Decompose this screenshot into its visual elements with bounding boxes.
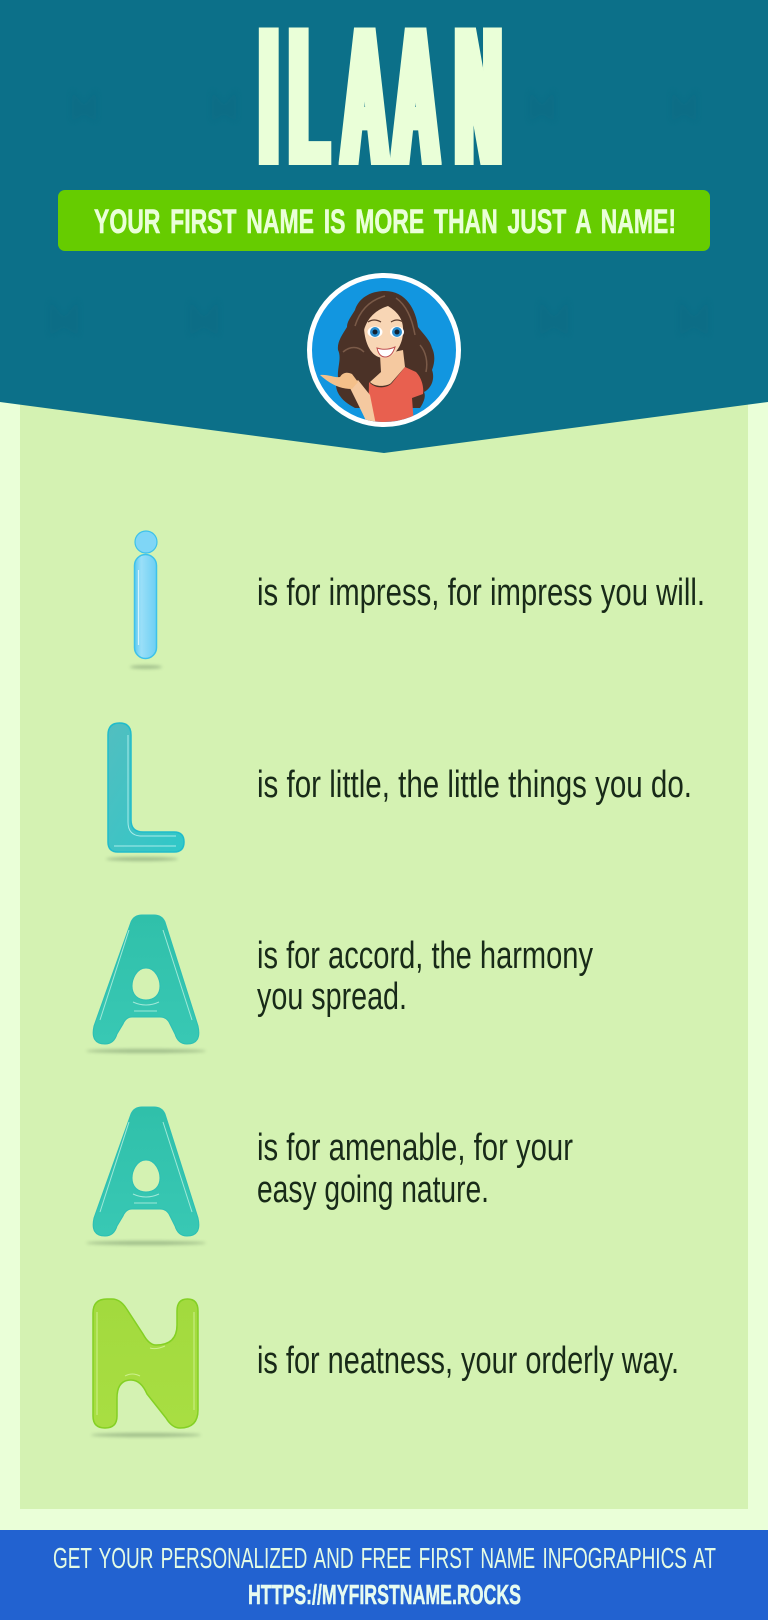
icon: letter A second — [86, 1107, 206, 1245]
panel: letters background — [20, 380, 748, 1509]
icon: woman avatar — [310, 276, 458, 425]
row: letter A: you spread. — [257, 976, 407, 1018]
row: letter N — [91, 1299, 679, 1437]
icon: letter A — [86, 915, 206, 1053]
header band — [0, 0, 768, 453]
icon: letter N — [91, 1299, 201, 1437]
text: amenable: is for amenable, for your — [257, 1127, 573, 1169]
footer text: url: HTTPS://MYFIRSTNAME.ROCKS — [248, 1579, 521, 1610]
icon: letter I — [130, 531, 162, 669]
row: letter A second: easy going nature. — [257, 1169, 489, 1211]
icon: letter L — [106, 723, 184, 861]
footer — [0, 1530, 768, 1620]
row: letter A second — [86, 1107, 573, 1245]
row: letter L — [106, 723, 692, 861]
banner — [58, 190, 710, 251]
text: accord: is for accord, the harmony — [257, 935, 593, 977]
row: letter A — [86, 915, 593, 1053]
row: letter I — [130, 531, 705, 669]
